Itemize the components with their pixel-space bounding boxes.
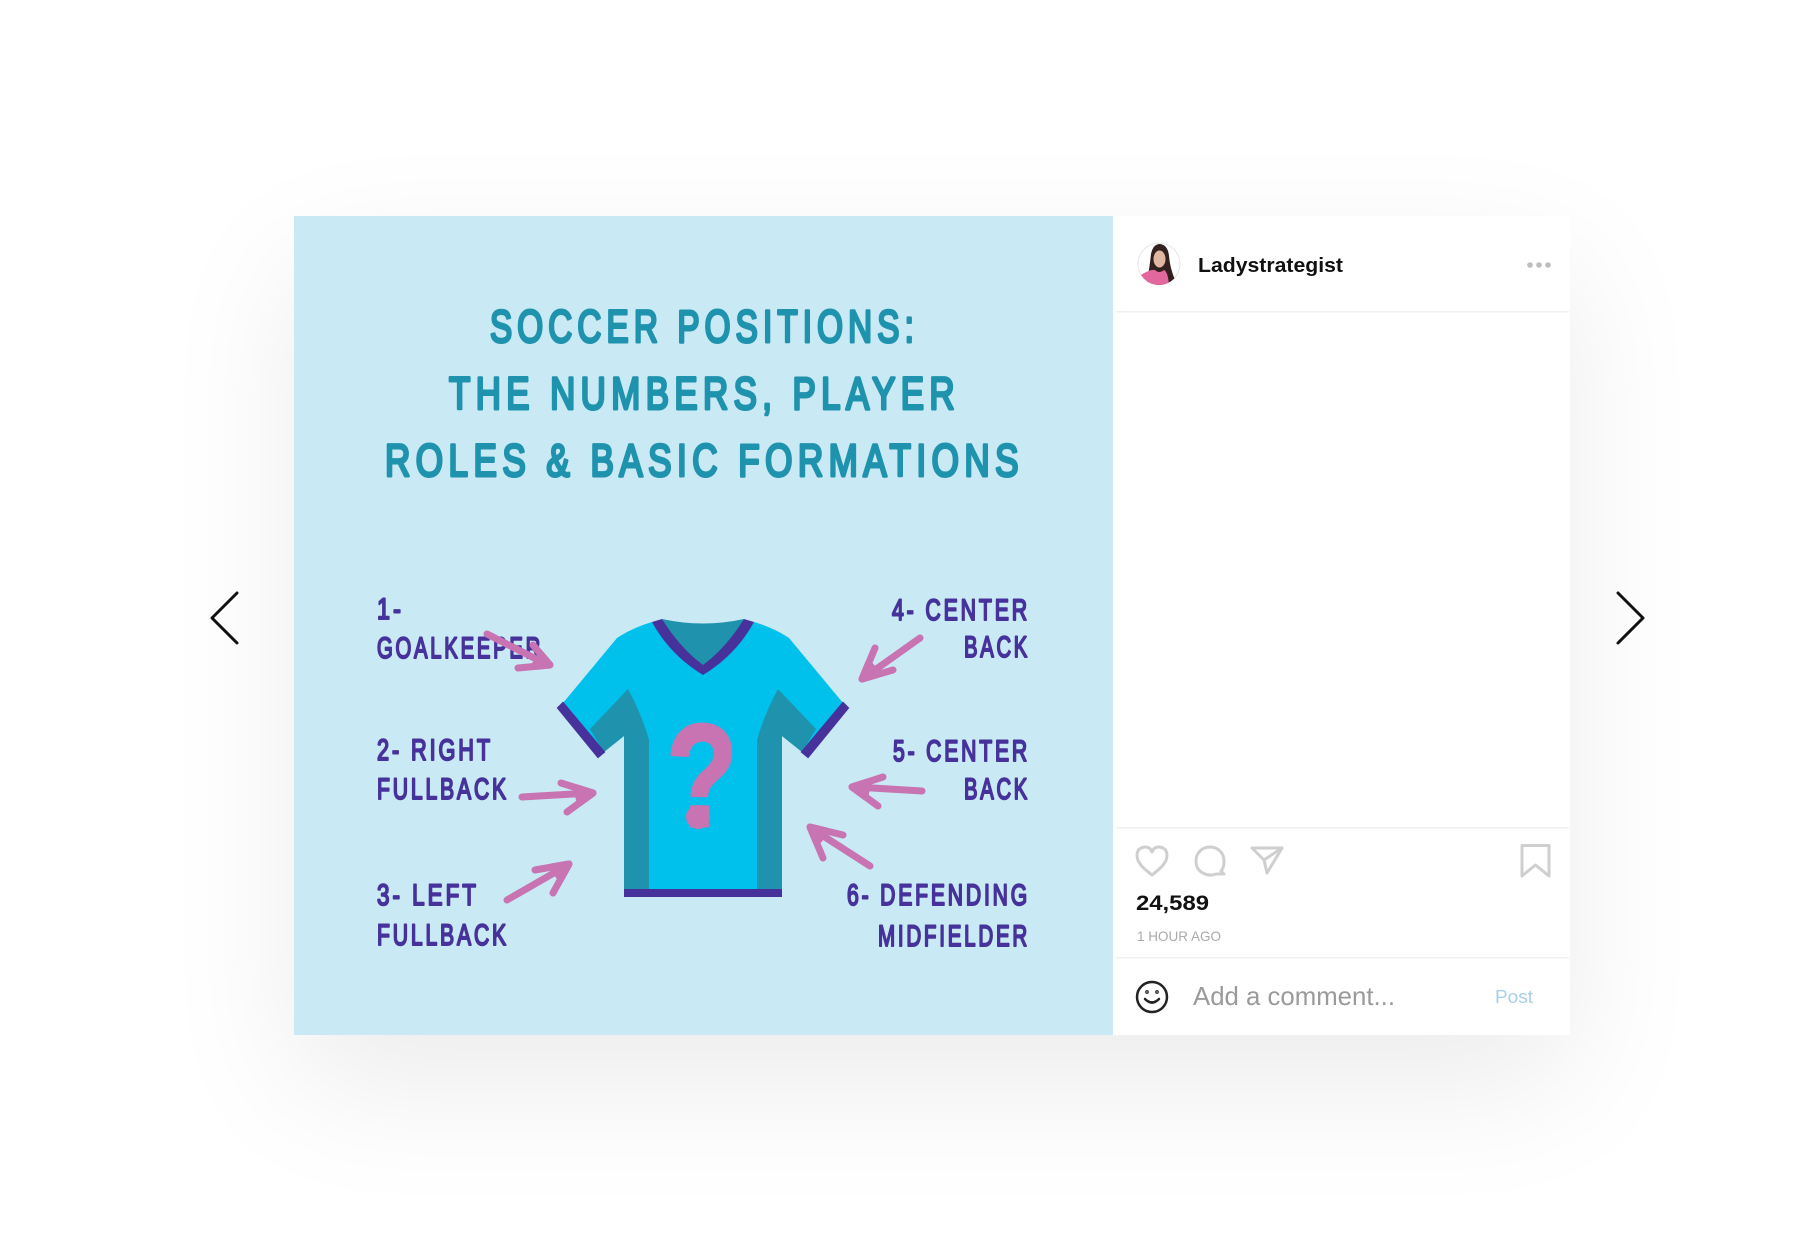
- title: [385, 301, 1024, 486]
- label: defending midfielder: 6- DEFENDING: [847, 879, 1030, 912]
- label: left fullback: 3- LEFT: [377, 879, 479, 912]
- panel: post sidebar: [1113, 216, 1570, 1035]
- arrow: center back 4: [862, 638, 920, 679]
- card shadow: [294, 216, 1570, 1035]
- title: THE NUMBERS, PLAYER: [449, 368, 960, 419]
- arrow: defending midfielder: [810, 827, 870, 866]
- comment divider: [1116, 957, 1569, 958]
- label: goalkeeper: [377, 593, 543, 665]
- label: center back 4: BACK: [964, 631, 1030, 664]
- likes count: 24,589: [1136, 891, 1209, 915]
- icon: bookmark: [1522, 846, 1549, 876]
- label: right fullback: [377, 734, 509, 806]
- label: goalkeeper: GOALKEEPER: [377, 632, 543, 665]
- arrow: left fullback: [507, 864, 569, 900]
- arrow: next: [1618, 593, 1643, 643]
- icon: heart: [1137, 847, 1167, 875]
- title: SOCCER POSITIONS:: [490, 301, 919, 352]
- more menu: [1527, 262, 1551, 268]
- label: center back 4: 4- CENTER: [892, 594, 1030, 627]
- panel: infographic image: [294, 216, 1113, 1035]
- label: center back 4: [892, 594, 1030, 664]
- icon: send: [1252, 848, 1282, 873]
- label: defending midfielder: MIDFIELDER: [878, 920, 1030, 953]
- label: right fullback: FULLBACK: [377, 773, 509, 806]
- post button: Post: [1495, 987, 1533, 1007]
- icon: smiley: [1137, 982, 1167, 1012]
- comment input placeholder: Add a comment...: [1193, 981, 1395, 1011]
- icon: comment: [1196, 847, 1224, 875]
- label: right fullback: 2- RIGHT: [377, 734, 493, 767]
- label: left fullback: [377, 879, 509, 952]
- header divider: [1116, 311, 1569, 312]
- instagram post mockup: [210, 216, 1645, 1035]
- username: Ladystrategist: [1198, 254, 1343, 277]
- label: center back 5: 5- CENTER: [893, 735, 1030, 768]
- title: ROLES & BASIC FORMATIONS: [385, 435, 1024, 486]
- arrow: right fullback: [522, 783, 593, 812]
- arrow: previous: [212, 593, 237, 643]
- avatar: [1138, 243, 1180, 290]
- label: left fullback: FULLBACK: [377, 919, 509, 952]
- actions divider: [1116, 827, 1569, 828]
- label: defending midfielder: [847, 879, 1030, 953]
- label: center back 5: BACK: [964, 773, 1030, 806]
- icon: jersey: [558, 619, 848, 897]
- question mark: ?: [666, 695, 738, 858]
- timestamp: 1 HOUR AGO: [1137, 928, 1221, 944]
- label: goalkeeper: 1-: [377, 593, 404, 626]
- arrow: center back 5: [852, 777, 922, 806]
- arrow: goalkeeper: [487, 634, 550, 668]
- label: center back 5: [893, 735, 1030, 806]
